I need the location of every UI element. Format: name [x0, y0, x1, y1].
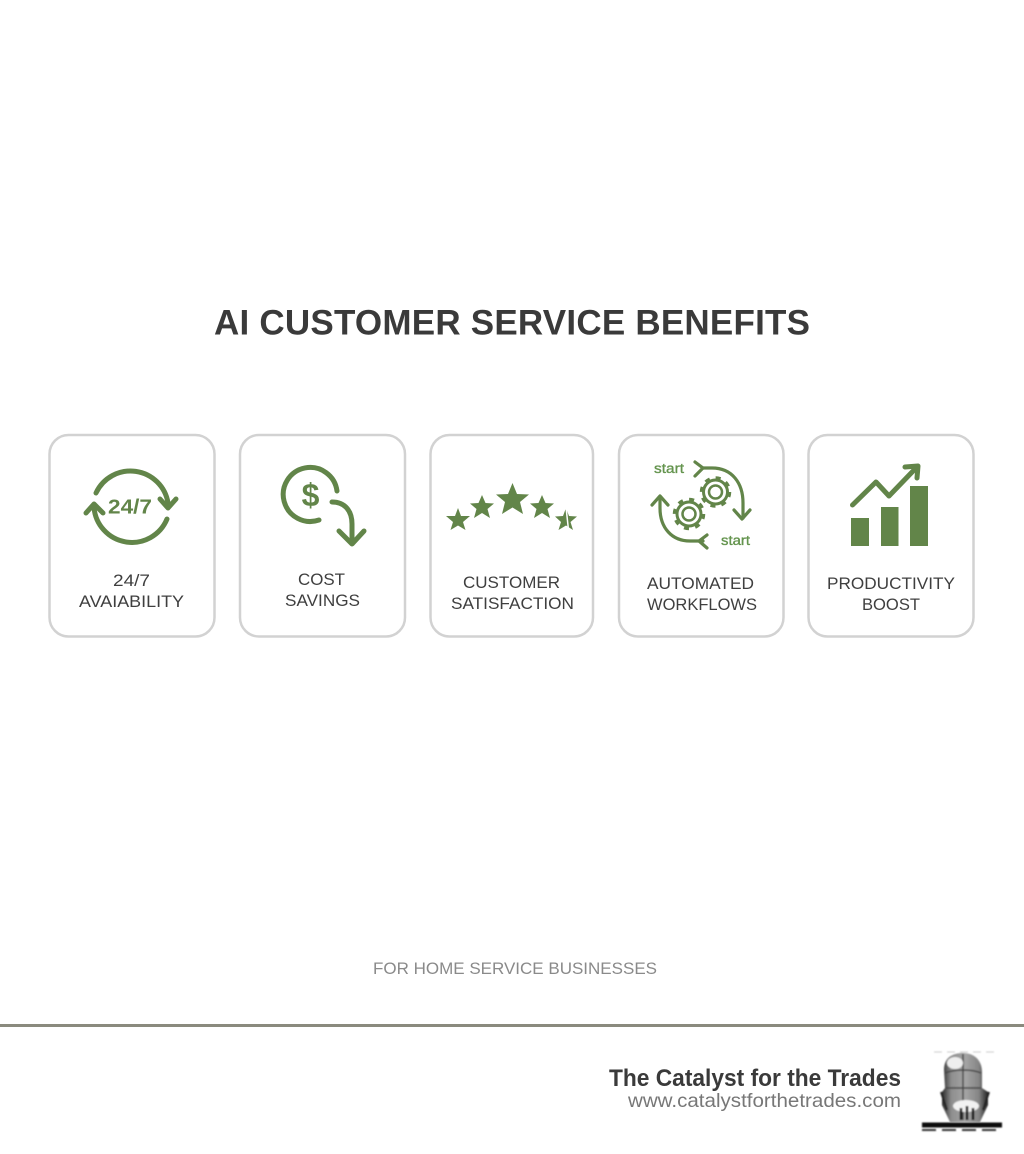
icon: 24/7 cycle arrows	[86, 471, 176, 542]
label: productivity boost: BOOST	[862, 595, 920, 614]
label: automated workflows: WORKFLOWS	[647, 595, 757, 614]
icon: five rating stars	[446, 483, 577, 530]
icon: workflow gears and arrows: start	[721, 533, 750, 548]
icon: microphone logo	[922, 1052, 1002, 1130]
subtitle: FOR HOME SERVICE BUSINESSES	[373, 959, 657, 978]
label: cost savings: SAVINGS	[285, 591, 360, 610]
icon: dollar coin with down arrow	[283, 467, 364, 544]
icon: workflow gears and arrows: start	[654, 461, 684, 476]
icon: 24/7 cycle arrows: 24/7	[108, 496, 152, 518]
label: 24/7 availability	[79, 571, 184, 611]
icon: workflow gears and arrows	[652, 461, 750, 548]
panel: customer satisfaction	[430, 435, 593, 636]
panel: productivity boost	[808, 435, 974, 636]
label: customer satisfaction	[451, 573, 574, 613]
footer brand name: The Catalyst for the Trades	[609, 1065, 901, 1092]
label: automated workflows	[647, 574, 757, 614]
label: productivity boost	[827, 574, 955, 614]
panel: automated workflows	[619, 435, 784, 636]
footer url: www.catalystforthetrades.com	[627, 1090, 901, 1112]
label: 24/7 availability: 24/7	[113, 571, 150, 590]
icon: rising bar chart	[851, 466, 928, 546]
title: AI CUSTOMER SERVICE BENEFITS	[214, 304, 810, 342]
label: customer satisfaction: CUSTOMER	[463, 573, 560, 592]
label: 24/7 availability: AVAIABILITY	[79, 592, 184, 611]
label: automated workflows: AUTOMATED	[647, 574, 754, 593]
icon: dollar coin with down arrow: $	[302, 477, 320, 513]
label: cost savings: COST	[298, 570, 345, 589]
label: productivity boost: PRODUCTIVITY	[827, 574, 955, 593]
panel: cost savings	[240, 435, 405, 636]
label: customer satisfaction: SATISFACTION	[451, 594, 574, 613]
label: cost savings	[285, 570, 360, 610]
panel: 24/7 availability	[50, 435, 214, 636]
